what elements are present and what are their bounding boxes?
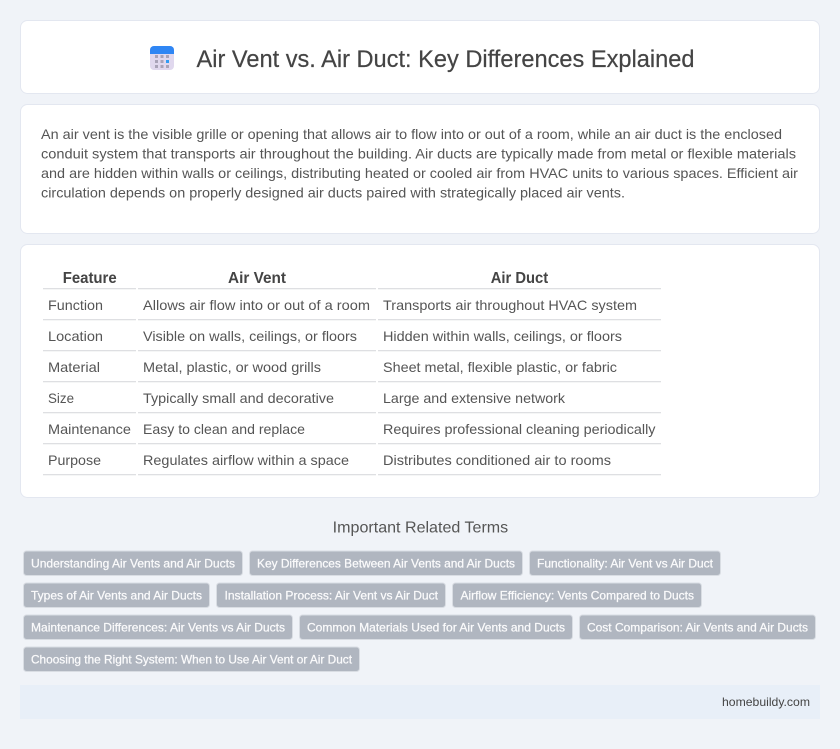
table row: maintenance: Easy to clean and replace xyxy=(143,421,305,437)
tag xyxy=(24,647,360,672)
tag: Types of Air Vents and Air Ducts xyxy=(31,588,202,602)
footer source text: homebuildy.com xyxy=(722,695,810,709)
table header row: Feature xyxy=(63,270,117,287)
panel: introduction text xyxy=(20,104,820,234)
panel: title card xyxy=(20,20,820,94)
text block: introduction paragraph: conduit system that transports air throughout the building. Air ducts are typically made from metal or flexible materials xyxy=(41,146,796,162)
tag xyxy=(24,615,292,640)
table row: material: Material xyxy=(48,359,100,375)
tag xyxy=(530,551,720,576)
table row: purpose xyxy=(48,452,611,468)
table row: function xyxy=(48,297,637,313)
tag xyxy=(24,551,242,576)
table row: maintenance: Requires professional cleaning periodically xyxy=(383,421,656,437)
table row: purpose: Distributes conditioned air to rooms xyxy=(383,452,611,468)
table row: size: Large and extensive network xyxy=(383,390,566,406)
tag xyxy=(250,551,522,576)
table row: size: Size xyxy=(48,390,74,406)
heading: important related terms: Important Related Terms xyxy=(333,520,508,537)
tag: Airflow Efficiency: Vents Compared to Ducts xyxy=(460,588,694,602)
text block: introduction paragraph: and are hidden within walls or ceilings, distributing heated or cooled air from HVAC units to various spaces. Efficient air xyxy=(41,165,798,181)
tag xyxy=(300,615,572,640)
tag xyxy=(24,583,210,608)
table row: function: Function xyxy=(48,297,103,313)
tag: Key Differences Between Air Vents and Air Ducts xyxy=(257,556,515,570)
table row: location: Visible on walls, ceilings, or floors xyxy=(143,328,357,344)
table row: location: Location xyxy=(48,328,103,344)
text block: introduction paragraph: circulation depends on properly designed air ducts paired with strategically placed air vents. xyxy=(41,184,625,200)
text block: introduction paragraph xyxy=(41,126,798,200)
table row: function: Allows air flow into or out of a room xyxy=(143,297,370,313)
tag: Common Materials Used for Air Vents and Ducts xyxy=(307,620,565,634)
tag xyxy=(580,615,816,640)
text block: introduction paragraph: An air vent is the visible grille or opening that allows air to flow into or out of a room, while an air duct is the enclosed xyxy=(41,126,782,142)
tag: Choosing the Right System: When to Use Air Vent or Air Duct xyxy=(31,652,353,666)
tag: Cost Comparison: Air Vents and Air Ducts xyxy=(587,620,808,634)
icon: calendar grid xyxy=(150,46,174,70)
table header row: Air Vent xyxy=(228,270,286,287)
table row: material: Sheet metal, flexible plastic, or fabric xyxy=(383,359,617,375)
panel: comparison table xyxy=(20,244,820,498)
table row: purpose: Regulates airflow within a space xyxy=(143,452,349,468)
table row: purpose: Purpose xyxy=(48,452,101,468)
table row: location: Hidden within walls, ceilings, or floors xyxy=(383,328,622,344)
table row: maintenance: Maintenance xyxy=(48,421,131,437)
table row: maintenance xyxy=(48,421,656,437)
table row: function: Transports air throughout HVAC system xyxy=(383,297,637,313)
tag: Functionality: Air Vent vs Air Duct xyxy=(537,556,714,570)
tag xyxy=(216,583,446,608)
tag xyxy=(452,583,702,608)
footer bar xyxy=(20,685,820,719)
tag: Installation Process: Air Vent vs Air Duct xyxy=(224,588,439,602)
table row: size: Typically small and decorative xyxy=(143,390,334,406)
table row: size xyxy=(48,390,566,406)
tag: Maintenance Differences: Air Vents vs Air Ducts xyxy=(31,620,285,634)
tag: Understanding Air Vents and Air Ducts xyxy=(31,556,235,570)
tag list: related terms xyxy=(24,551,816,672)
table header row xyxy=(63,270,548,287)
table header row: Air Duct xyxy=(491,270,548,287)
table row: material: Metal, plastic, or wood grills xyxy=(143,359,321,375)
table row: location xyxy=(48,328,622,344)
table row: material xyxy=(48,359,617,375)
title: Air Vent vs. Air Duct: Key Differences Explained xyxy=(196,46,694,73)
